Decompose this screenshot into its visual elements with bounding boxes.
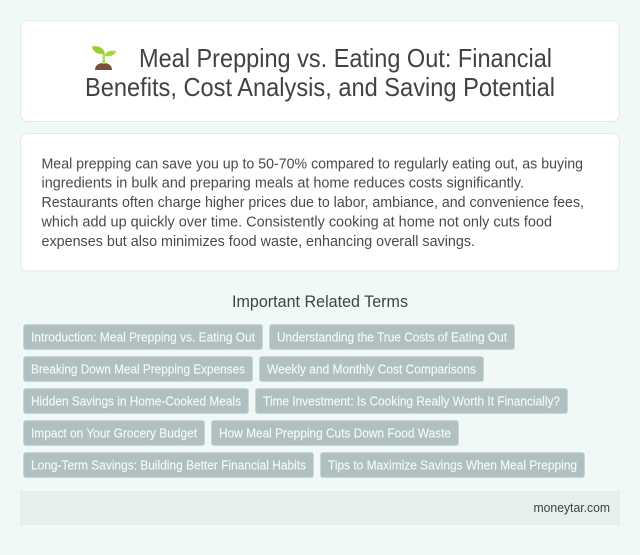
icon: sprout bbox=[92, 46, 116, 70]
tag bbox=[24, 324, 262, 350]
tag bbox=[320, 452, 584, 478]
panel: related term tags bbox=[24, 324, 584, 478]
tag: Introduction: Meal Prepping vs. Eating Out bbox=[31, 330, 255, 344]
tag: Weekly and Monthly Cost Comparisons bbox=[267, 362, 476, 376]
summary text: ingredients in bulk and preparing meals at home reduces costs significantly. bbox=[42, 175, 524, 192]
tag: Time Investment: Is Cooking Really Worth It Financially? bbox=[263, 394, 560, 408]
summary text: Meal prepping can save you up to 50-70% compared to regularly eating out, as buying bbox=[42, 155, 583, 172]
tag: Hidden Savings in Home-Cooked Meals bbox=[31, 394, 241, 408]
tag bbox=[24, 452, 314, 478]
footer source text: moneytar.com bbox=[534, 500, 610, 515]
title: Benefits, Cost Analysis, and Saving Potential bbox=[85, 72, 555, 102]
tag bbox=[212, 420, 458, 446]
tag bbox=[260, 356, 484, 382]
heading: important related terms: Important Related Terms bbox=[232, 293, 408, 311]
tag bbox=[270, 324, 514, 350]
summary text: which add up quickly over time. Consistently cooking at home not only cuts food bbox=[41, 214, 552, 231]
tag: Long-Term Savings: Building Better Financial Habits bbox=[31, 458, 306, 472]
tag bbox=[256, 388, 568, 414]
tag bbox=[24, 356, 252, 382]
summary text: expenses but also minimizes food waste, enhancing overall savings. bbox=[42, 233, 475, 250]
tag bbox=[24, 420, 204, 446]
summary text: Restaurants often charge higher prices due to labor, ambiance, and convenience fees, bbox=[42, 194, 584, 211]
tag: Impact on Your Grocery Budget bbox=[31, 426, 197, 440]
tag: How Meal Prepping Cuts Down Food Waste bbox=[219, 426, 451, 440]
tag bbox=[24, 388, 248, 414]
panel: title card bbox=[20, 20, 620, 122]
footer bbox=[20, 491, 620, 525]
title bbox=[85, 43, 555, 102]
title: Meal Prepping vs. Eating Out: Financial bbox=[139, 43, 552, 73]
tag: Tips to Maximize Savings When Meal Prepping bbox=[328, 458, 577, 472]
summary text bbox=[41, 155, 584, 250]
tag: Understanding the True Costs of Eating Out bbox=[277, 330, 507, 344]
panel: summary paragraph bbox=[20, 134, 620, 271]
tag: Breaking Down Meal Prepping Expenses bbox=[31, 362, 245, 376]
